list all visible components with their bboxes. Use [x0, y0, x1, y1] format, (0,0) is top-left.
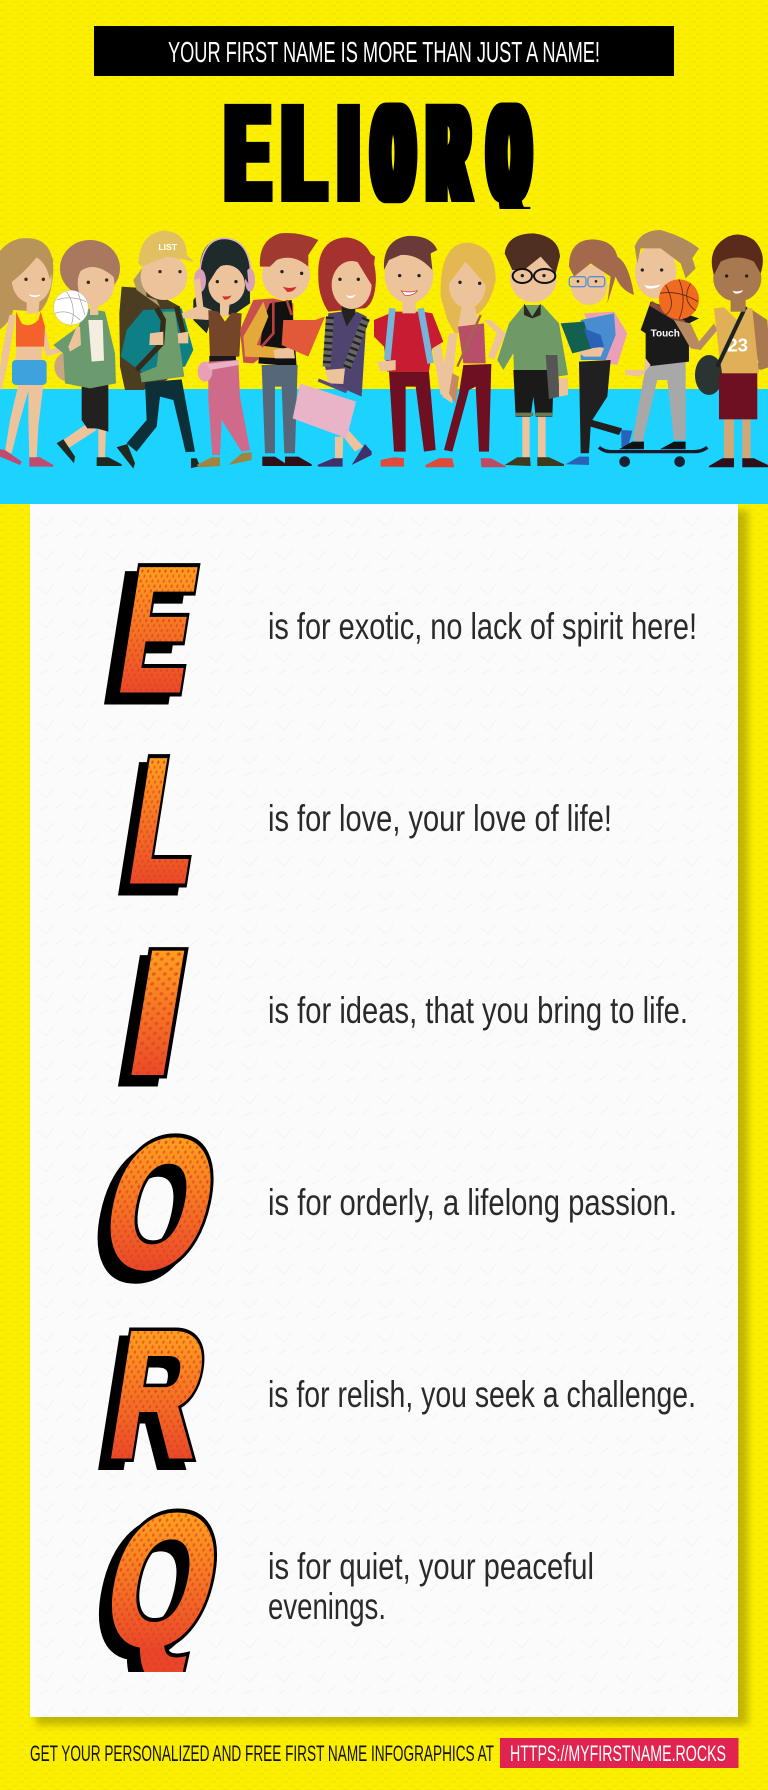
title [224, 102, 534, 209]
character 11: skater with basketball [599, 230, 717, 467]
character 12: boy in number 23 jersey [695, 235, 768, 467]
title: I [339, 79, 358, 228]
line: Q [268, 1546, 594, 1627]
footer [30, 1738, 738, 1768]
card shadow [36, 510, 748, 1725]
decorative letter Q: Q [90, 1479, 236, 1684]
decorative letter R: R [99, 1295, 218, 1494]
letter E row [96, 531, 697, 736]
title: Q [491, 79, 527, 228]
skateboard [599, 447, 707, 467]
decorative letter I: I [115, 915, 201, 1111]
decorative letter I: I [106, 923, 192, 1119]
letter Q row [98, 1508, 592, 1672]
letter L row [110, 722, 612, 927]
title: L [283, 79, 324, 228]
decorative letter I: I [115, 915, 201, 1111]
title: O [375, 79, 411, 228]
decorative letter R: R [99, 1295, 218, 1494]
character 9: boy with glasses and laptop [497, 233, 568, 466]
decorative letter O: O [79, 1112, 222, 1313]
top banner [94, 26, 674, 76]
decorative letter R: R [99, 1295, 218, 1494]
line: Q: evenings. [268, 1586, 386, 1627]
character 10: ponytail girl with tablet [561, 239, 634, 465]
character 8: blonde girl [426, 243, 506, 467]
icon: volleyball [54, 290, 88, 325]
title: E [227, 79, 269, 228]
line: L: is for love, your love of life! [268, 798, 612, 839]
decorative letter O: O [89, 1103, 232, 1304]
character 5: boy with open book [240, 233, 325, 466]
character 6: girl with pink case [293, 237, 376, 467]
character 4: girl with headphones [182, 238, 255, 467]
decorative letter Q: Q [80, 1487, 226, 1692]
white content panel [30, 504, 738, 1717]
letter R row [89, 1295, 696, 1502]
footer text: GET YOUR PERSONALIZED AND FREE FIRST NAME INFOGRAPHICS AT [30, 1741, 494, 1766]
icon: basketball [659, 279, 699, 319]
character 11: skater with basketball: Touch [651, 329, 680, 340]
decorative letter Q: Q [90, 1479, 236, 1684]
letter O row [79, 1103, 677, 1313]
decorative letter E: E [109, 531, 208, 728]
pink case [293, 383, 356, 438]
decorative letter E: E [96, 539, 195, 736]
character 3: backpacker with cap [117, 231, 200, 469]
decorative letter L: L [110, 730, 203, 927]
decorative letter I: I [115, 915, 201, 1111]
decorative letter E: E [109, 531, 208, 728]
right characters [374, 230, 768, 467]
line: Q: is for quiet, your peaceful [268, 1546, 594, 1587]
decorative letter Q: Q [90, 1479, 236, 1684]
blue floor band [0, 389, 768, 504]
decorative letter L: L [119, 722, 212, 919]
decorative letter O: O [89, 1103, 232, 1304]
character 3: backpacker with cap: LIST [158, 242, 178, 252]
letter I row [106, 915, 688, 1119]
decorative letter L: L [119, 722, 212, 919]
character 1: girl in orange top [0, 238, 80, 467]
decorative letter L: L [119, 722, 212, 919]
decorative letter Q [98, 1508, 218, 1672]
group of twelve characters [0, 230, 768, 469]
character 7: boy in red shirt with backpack [374, 236, 454, 467]
decorative letter R: R [89, 1303, 208, 1502]
title: R [429, 78, 468, 228]
decorative letter E: E [109, 531, 208, 728]
left characters [0, 231, 376, 469]
character 2: girl with volleyball [53, 240, 122, 466]
character 12: boy in number 23 jersey: 23 [727, 335, 748, 356]
decorative letter O: O [89, 1103, 232, 1304]
